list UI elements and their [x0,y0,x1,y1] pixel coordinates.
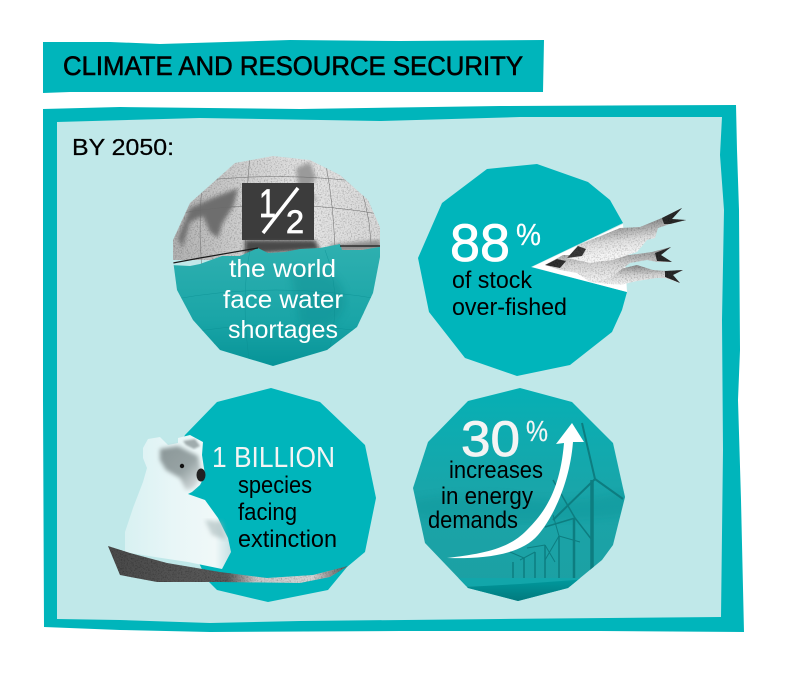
fish [545,208,686,285]
koala [125,435,231,569]
koala statistic: 1 billion [108,388,376,602]
wind farm badge [410,385,630,605]
fish caption: of stock [452,267,533,294]
energy caption: in energy [441,483,533,510]
energy caption: increases [449,457,543,484]
88 percent figure: 88 [450,214,510,273]
30 percent figure [461,411,548,467]
88 percent figure: % [516,217,541,252]
title banner: CLIMATE AND RESOURCE SECURITY [63,51,523,81]
rising arrow [447,423,584,558]
koala caption [238,472,337,553]
globe caption [223,255,343,344]
one half fraction: 1 [259,182,276,226]
30 percent figure: % [526,416,548,448]
energy caption [428,457,543,534]
30 percent figure: 30 [461,411,520,467]
koala badge shape [160,388,376,602]
koala caption: species [238,472,312,499]
koala caption: extinction [238,526,337,553]
one half fraction [259,182,304,240]
water fill [170,244,385,370]
energy caption: demands [428,507,518,534]
koala caption: facing [238,499,297,526]
fish caption [452,267,567,321]
globe caption: the world [229,255,336,283]
pie gap highlight [532,224,627,292]
branch [108,546,348,583]
title banner [43,40,544,93]
88 percent figure [450,214,541,273]
energy statistic: 30 percent [410,385,630,605]
fish caption: over-fished [452,294,567,321]
half fraction box [242,183,314,240]
subheading: by 2050: BY 2050: [72,134,174,160]
1 billion figure: 1 BILLION [212,442,335,474]
main framed panel [43,105,744,632]
globe caption: shortages [228,316,338,344]
one half fraction: 2 [286,204,304,240]
infographic canvas [43,40,744,632]
globe: half the world [170,150,385,370]
fish pie shape [418,164,627,376]
wind turbines [510,423,623,578]
globe land and map [170,150,385,370]
globe caption: face water [223,286,343,314]
fish statistic: 88 percent [418,164,686,376]
